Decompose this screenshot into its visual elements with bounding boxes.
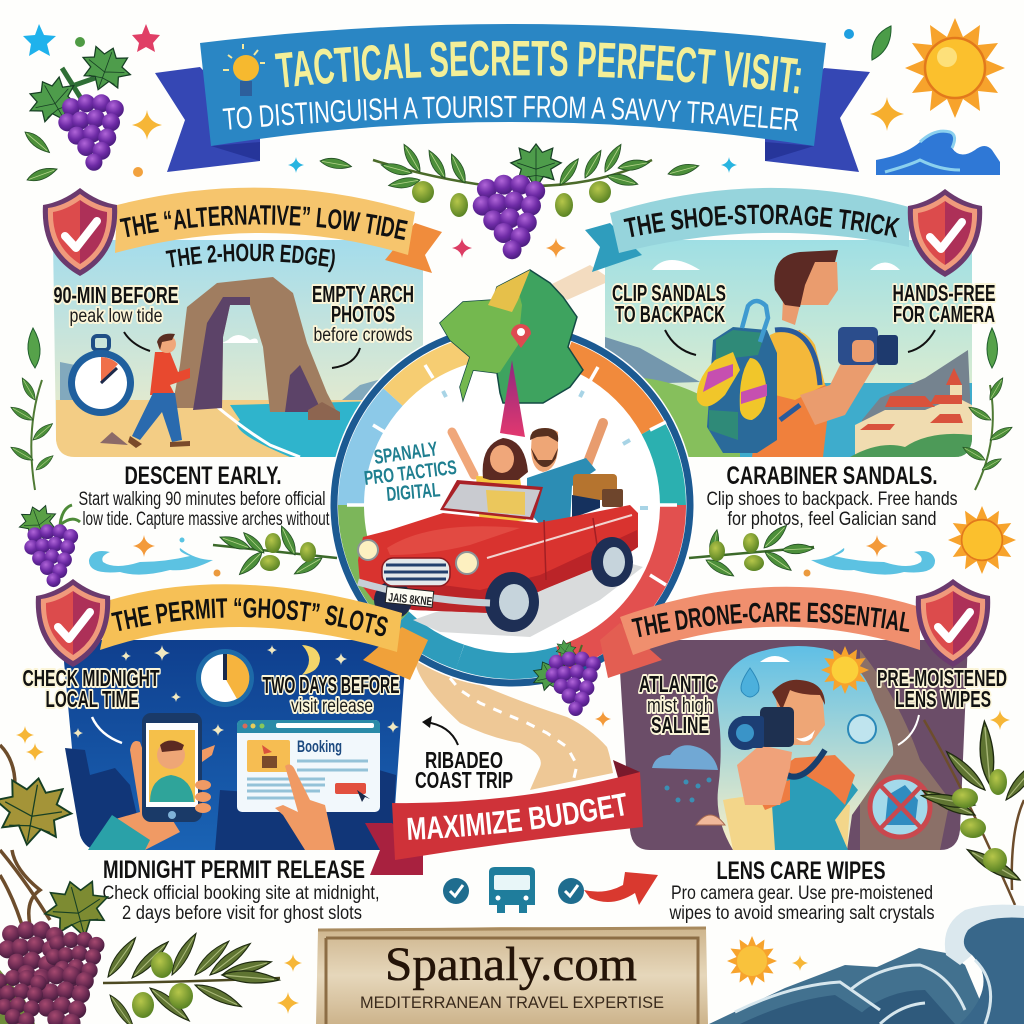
label: check midnight: CHECK MIDNIGHT: [22, 665, 160, 691]
ribbon: drone heading: THE DRONE-CARE ESSENTIAL: [631, 602, 910, 638]
central ring: [329, 322, 695, 688]
panel: permit ghost slots: [22, 579, 428, 924]
ribbon: permit heading: THE PERMIT “GHOST” SLOTS: [111, 598, 388, 636]
caption: Clip shoes to backpack. Free hands: [706, 489, 958, 510]
icon: photographer: [728, 680, 858, 850]
caption: DESCENT EARLY.: [124, 462, 282, 490]
decoration: sparkles: [990, 710, 1010, 730]
ribbon: shoe heading: [585, 188, 909, 272]
icon: grille and lights: [358, 540, 490, 603]
caption: [78, 462, 330, 530]
icon: phone and hand: [88, 713, 215, 850]
label: spanaly pro tactics: PRO TACTICS: [363, 457, 458, 490]
label: empty arch: [312, 281, 414, 346]
label: spanaly pro tactics: [363, 438, 458, 506]
label: atlantic: SALINE: [651, 712, 709, 738]
label: spanaly pro tactics: DIGITAL: [386, 479, 441, 506]
icon: browser window: Booking: [297, 737, 342, 756]
icon: sun top right: [905, 18, 1005, 118]
label: empty arch: PHOTOS: [331, 301, 395, 327]
road to coast: [415, 660, 613, 790]
icon: couple: [452, 423, 603, 530]
caption: [669, 857, 934, 924]
brand name: Spanaly.com: [385, 938, 637, 991]
panel scene: [618, 640, 968, 850]
label: two days: [262, 672, 400, 717]
label: clip sandals: CLIP SANDALS: [612, 280, 726, 306]
icon: wave top right: [876, 131, 1000, 175]
icon: red car: [358, 480, 638, 632]
icon: light bulb: [223, 44, 265, 96]
label: pre-moistened: [877, 665, 1007, 712]
label: spanaly pro tactics: SPANALY: [373, 438, 440, 469]
icon: map pin spike: [500, 360, 525, 437]
panel: shoe storage: [585, 188, 996, 530]
ribbon: shoe heading: THE SHOE-STORAGE TRICK: [624, 204, 900, 238]
label: 90-min: 90-MIN BEFORE: [54, 282, 178, 308]
icon: sun right: [948, 506, 1016, 574]
decoration: right vine: [961, 328, 1014, 490]
shadow: ground: [413, 555, 643, 637]
icon: luggage: [572, 474, 623, 518]
label: plate: JAIS 8KNE: [388, 590, 433, 609]
arrow: [332, 348, 360, 368]
icon: galicia map: [440, 270, 583, 403]
arrow: [898, 715, 919, 745]
arrow: ribadeo: [422, 716, 458, 745]
icon: top left stars and dots: [23, 24, 160, 177]
central illustration: [358, 270, 643, 637]
label: atlantic: mist high: [647, 695, 713, 717]
icon: water drop: [741, 668, 759, 697]
caption: MIDNIGHT PERMIT RELEASE: [103, 856, 365, 884]
label: empty arch: before crowds: [314, 325, 412, 346]
caption: LENS CARE WIPES: [716, 857, 886, 885]
icon: checks bus arrow: [443, 867, 658, 913]
arrow: [665, 330, 696, 355]
decoration: bottom right olive and wave: [709, 720, 1024, 1024]
panel: alternative low tide: [42, 188, 442, 530]
caption: Check official booking site at midnight,: [102, 883, 380, 904]
icon: stopwatch: [68, 336, 134, 416]
caption: Pro camera gear. Use pre-moistened: [671, 883, 933, 904]
icon: rain cloud: [652, 745, 718, 802]
caption: for photos, feel Galician sand: [728, 509, 936, 530]
icon: olive branch and grapes top centre: [373, 142, 652, 259]
ribbon: low tide heading: [115, 188, 442, 273]
decoration: right mid branch: [689, 506, 1016, 580]
icon: shell: [696, 815, 725, 825]
ribbon: low tide heading: THE “ALTERNATIVE” LOW TIDE: [120, 205, 408, 240]
caption: [102, 856, 380, 924]
panel scene: [62, 640, 407, 850]
icon: camera: [728, 707, 794, 750]
ribbon: drone heading: [600, 586, 920, 678]
icon: no salt sign: [870, 777, 930, 837]
label: atlantic: [639, 671, 717, 738]
icon: grapes top left: [21, 40, 162, 184]
title line 2: TO DISTINGUISH A TOURIST FROM A SAVVY TRAVELER: [222, 96, 798, 131]
panel: drone care: [600, 579, 1008, 924]
label: empty arch: EMPTY ARCH: [312, 281, 414, 307]
icon: shield: [43, 188, 117, 276]
icon: pointing hand: [275, 764, 335, 850]
icon: shield: [908, 189, 982, 277]
icon: walking person: [128, 334, 190, 448]
arrow: [908, 330, 935, 352]
decoration: left vine: [9, 328, 55, 490]
icon: sandals: [697, 352, 767, 420]
icon: car wheels: [374, 537, 633, 632]
label: ribadeo coast trip: COAST TRIP: [415, 767, 513, 793]
label: two days: TWO DAYS BEFORE: [262, 672, 400, 698]
label: 90-min: peak low tide: [70, 306, 162, 327]
label: check midnight: [22, 665, 160, 712]
icon: centre grapes: [527, 637, 611, 727]
label: 90-min: [54, 282, 178, 327]
icon: traveler: [752, 250, 898, 457]
label: clip sandals: TO BACKPACK: [615, 301, 725, 327]
icon: bacteria circle: [848, 715, 876, 743]
label: ribadeo coast trip: [415, 747, 513, 793]
icon: small leaves and sparkles: [288, 156, 737, 178]
icon: sparkle and leaf top right: [844, 26, 904, 131]
label: atlantic: ATLANTIC: [639, 671, 717, 697]
label: check midnight: LOCAL TIME: [46, 686, 138, 712]
panel scene: [605, 240, 972, 457]
label: plate: [385, 587, 434, 609]
ribbon: maximize budget: [365, 760, 643, 875]
label: clip sandals: [612, 280, 726, 327]
brand tagline: MEDITERRANEAN TRAVEL EXPERTISE: [360, 993, 664, 1012]
icon: browser window: [237, 720, 380, 812]
decoration: left mid branch: [14, 500, 337, 587]
label: ribadeo coast trip: RIBADEO: [425, 747, 503, 773]
title banner: [155, 24, 870, 172]
brand plaque: [316, 927, 708, 1024]
icon: shield: [916, 579, 990, 667]
ribbon: maximize budget: MAXIMIZE BUDGET: [408, 792, 626, 840]
icon: sun: [821, 646, 869, 694]
caption: [706, 462, 958, 530]
icon: moon: [302, 645, 320, 675]
caption: Start walking 90 minutes before official: [78, 489, 326, 510]
caption: CARABINER SANDALS.: [726, 462, 938, 490]
panel scene: [53, 240, 423, 457]
caption: 2 days before visit for ghost slots: [122, 903, 362, 924]
label: two days: visit release: [291, 696, 373, 717]
icon: shield: [36, 579, 110, 667]
subheading: THE 2-HOUR EDGE): [166, 244, 335, 272]
title line 1: TACTICAL SECRETS PERFECT VISIT:: [274, 40, 802, 94]
ribbon: permit heading: [100, 584, 428, 680]
icon: backpack: [697, 301, 777, 453]
icon: bottom sun: [727, 936, 808, 986]
arrow: [92, 717, 122, 743]
caption: wipes to avoid smearing salt crystals: [669, 903, 934, 924]
icon: camera: [838, 327, 898, 365]
decoration: bottom left grapes and vine: [0, 726, 302, 1024]
label: hands-free: [892, 280, 996, 327]
caption: low tide. Capture massive arches without: [82, 509, 330, 530]
icon: rock arch: [172, 277, 337, 412]
icon: clock: [196, 649, 254, 707]
arrow: [124, 332, 150, 351]
